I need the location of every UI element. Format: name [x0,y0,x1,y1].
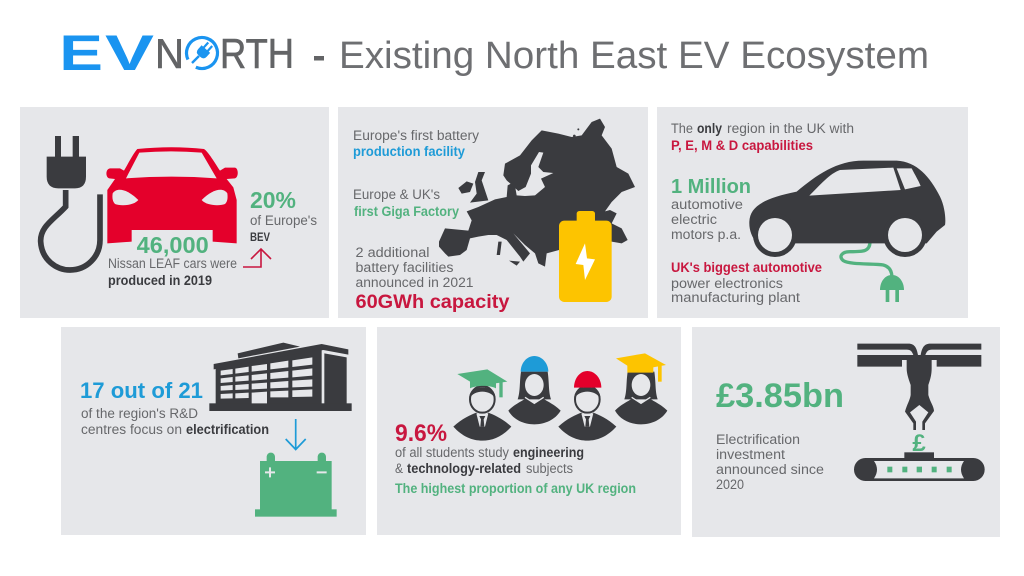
text: only region [671,121,854,153]
stat: 20% of Europe's BEV: 20% [250,187,296,213]
logo: EV North: RTH [220,30,294,77]
text: electrification investment: announced since [716,462,824,477]
panel: battery production [338,107,648,318]
text: highest proportion: The highest proportion of any UK region [395,481,636,496]
map: Europe [439,119,635,267]
stat: 20% of Europe's BEV [250,187,317,244]
text: electrification investment: Electrification [716,432,800,447]
text: only region: only [697,121,722,136]
text: additional facilities: announced in 2021 [356,275,474,290]
panel: investment [692,327,1000,537]
icon: electric car side view [749,161,945,302]
text: first Giga Factory: first Giga Factory [354,204,459,219]
icon: robotic claw and conveyor [854,344,985,481]
text: electrification investment: 2020 [716,477,744,492]
stat: 1 Million motors: electric [671,212,717,227]
stat: 20% of Europe's BEV: of Europe's [250,213,317,228]
text: first battery production facility [353,128,479,159]
text: R&D focus: electrification [186,422,269,437]
text: students study: engineering [513,445,584,460]
icon: red car front [106,147,238,243]
text: electrification investment: investment [716,447,785,462]
stat: 17 out of 21: 17 out of 21 [80,378,203,403]
stat: 1 Million motors: motors p.a. [671,227,741,242]
text: Nissan LEAF cars: produced in 2019 [108,273,212,288]
text: biggest plant: UK's biggest automotive [671,260,822,275]
icon: building [209,343,352,411]
icon: man with red hard hat [558,371,616,441]
text: R&D focus: of the region's R&D [81,406,198,421]
icon: green battery [255,453,337,517]
logo: EV North: V [105,25,155,81]
stat: 46,000: 46,000 [137,232,209,258]
logo: EV North: N [155,30,184,77]
text: students study [395,445,584,476]
text: R&D focus: centres focus on [81,422,182,437]
stat: 20% of Europe's BEV: BEV [250,230,270,244]
text: first battery production facility: production facility [353,144,465,159]
arrow: up to share [243,249,271,267]
icon: graduate woman with yellow cap [615,353,667,424]
text: first Giga Factory [353,187,459,219]
panel: Nissan LEAF production [20,107,329,318]
icon: plug and cable [41,136,100,270]
text: biggest plant: manufacturing plant [671,290,800,305]
text: Nissan LEAF cars [108,256,237,288]
text: students study: & [395,461,403,476]
stat: 1 Million motors: 1 Million [671,176,751,198]
text: electrification investment [716,432,824,492]
title: Existing North East EV Ecosystem [339,35,929,77]
stat: 9.6%: 9.6% [395,420,447,447]
text: first Giga Factory: Europe & UK's [353,187,440,202]
text: additional facilities: 60GWh capacity [356,292,510,313]
logo: EV North [59,25,294,81]
arrow: down to battery [286,419,306,450]
text: biggest plant: power electronics [671,276,783,291]
panel: students [377,327,681,535]
text: Nissan LEAF cars: Nissan LEAF cars were [108,256,237,271]
icon: robotic claw and conveyor: £ [912,430,926,457]
text: additional facilities [356,245,510,313]
text: first battery production facility: Europe's first battery [353,128,479,143]
text: only region: region in the UK with [727,121,854,136]
stat: £3.85bn: £3.85bn [716,377,844,415]
panel: motors and power electronics [657,107,968,318]
text: students study: subjects [526,461,573,476]
stat: 1 Million motors [671,176,751,242]
icon: woman with blue hard hat [508,356,561,424]
icon: yellow battery with bolt [559,211,612,302]
stat: 1 Million motors: automotive [671,197,743,212]
panel: R&D centres [61,327,366,535]
icon: graduate man with green cap [453,369,511,441]
text: additional facilities: 2 additional [356,245,430,260]
text: only region: P, E, M & D capabilities [671,138,813,153]
text: biggest plant [671,260,822,305]
text: students study: technology-related [407,461,521,476]
logo: EV North: E [59,25,103,81]
text: only region: The [671,121,693,136]
text: R&D focus [81,406,269,437]
text: additional facilities: battery facilities [356,260,454,275]
text: students study: of all students study [395,445,509,460]
